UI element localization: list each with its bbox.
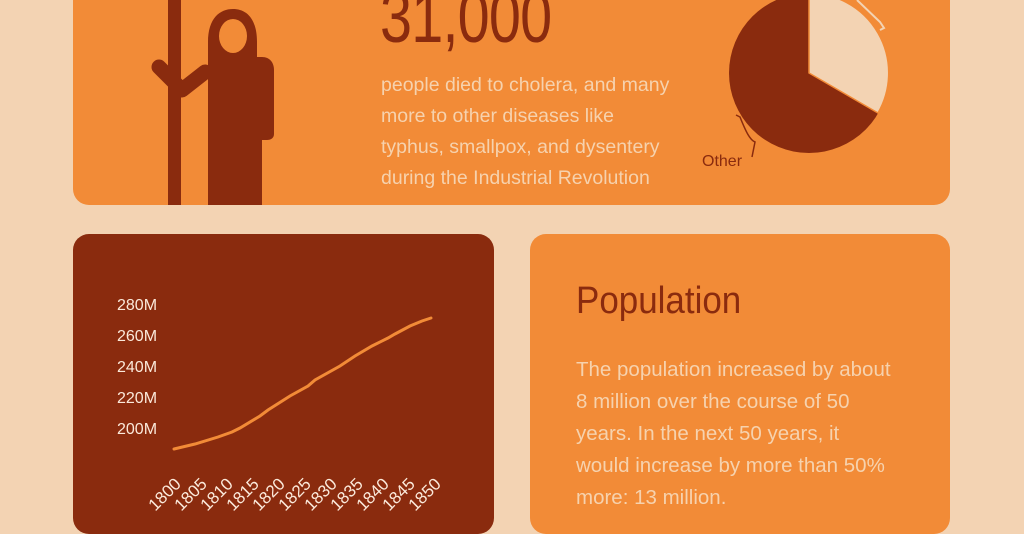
text block: more to other diseases like bbox=[381, 105, 614, 127]
text block: people died to cholera, and many bbox=[381, 74, 669, 96]
text block: 8 million over the course of 50 bbox=[576, 390, 849, 413]
text block: more: 13 million. bbox=[576, 486, 726, 509]
pie chart bbox=[702, 0, 888, 170]
line chart: 240M bbox=[117, 359, 157, 376]
text block: typhus, smallpox, and dysentery bbox=[381, 136, 660, 158]
text block: during the Industrial Revolution bbox=[381, 167, 650, 189]
line chart: 280M bbox=[117, 297, 157, 314]
panel: population bbox=[530, 234, 950, 534]
panel: cholera bbox=[73, 0, 950, 205]
text block: years. In the next 50 years, it bbox=[576, 422, 839, 445]
line chart: 260M bbox=[117, 328, 157, 345]
text block: would increase by more than 50% bbox=[576, 454, 885, 477]
panel: line chart bbox=[73, 234, 494, 534]
label: Other: Other bbox=[702, 153, 743, 170]
line chart: 200M bbox=[117, 421, 157, 438]
line chart bbox=[117, 297, 445, 512]
line chart: 220M bbox=[117, 390, 157, 407]
text block: The population increased by about bbox=[576, 358, 891, 381]
text block bbox=[576, 358, 891, 509]
text block bbox=[381, 74, 670, 189]
heading: Population bbox=[576, 280, 741, 322]
icon: hooded figure with staff bbox=[152, 0, 274, 205]
